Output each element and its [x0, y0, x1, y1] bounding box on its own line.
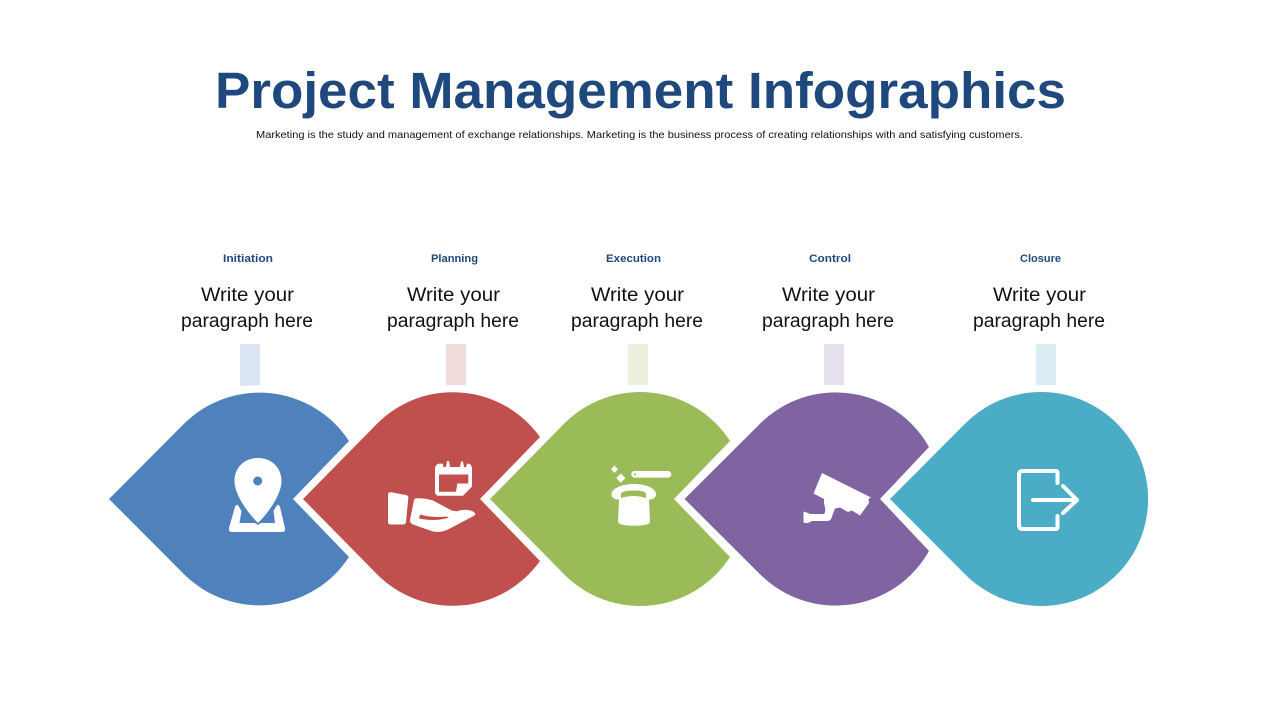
text block: initiation [181, 285, 313, 332]
text block: execution: paragraph here [571, 311, 703, 332]
connector: closure [1036, 344, 1056, 385]
title: Project Management Infographics [215, 62, 1066, 119]
icon: exit door with arrow [1019, 471, 1077, 529]
icon: hand holding calendar [388, 461, 475, 532]
text block: control [762, 285, 894, 332]
text block: control: paragraph here [762, 311, 894, 332]
step 1: initiation [109, 253, 349, 605]
step 2: planning [303, 253, 540, 606]
text block: planning: paragraph here [387, 311, 519, 332]
step 4: control [684, 253, 929, 606]
text block: planning [387, 285, 519, 332]
heading: execution: Execution [606, 253, 661, 265]
connector: planning [446, 344, 466, 385]
subtitle: Marketing is the study and management of exchange relationships. Marketing is the business process of creating relationships with and satisfying customers. [256, 129, 1023, 141]
connector: initiation [240, 344, 260, 386]
text block: planning: Write your [407, 285, 501, 306]
text block: closure: Write your [993, 285, 1087, 306]
text block: closure: paragraph here [973, 311, 1105, 332]
connector: control [824, 344, 844, 385]
text block: execution: Write your [591, 285, 685, 306]
icon: map pin [229, 458, 285, 532]
heading: initiation: Initiation [223, 253, 273, 265]
shape: green teardrop [490, 392, 730, 606]
text block: control: Write your [782, 285, 876, 306]
icon: security camera [804, 473, 871, 523]
heading: closure: Closure [1020, 253, 1061, 265]
step 3: execution [490, 253, 730, 606]
shape: purple teardrop [684, 392, 929, 606]
text block: initiation: paragraph here [181, 311, 313, 332]
heading: control: Control [809, 253, 851, 265]
shape: red teardrop [303, 392, 540, 606]
icon: magic hat and wand [611, 466, 671, 526]
text block: initiation: Write your [201, 285, 295, 306]
shape: teal teardrop [890, 392, 1148, 606]
text block: closure [973, 285, 1105, 332]
step 5: closure [890, 253, 1148, 606]
shape: blue teardrop [109, 393, 349, 605]
heading: planning: Planning [431, 253, 478, 265]
text block: execution [571, 285, 703, 332]
connector: execution [628, 344, 648, 385]
